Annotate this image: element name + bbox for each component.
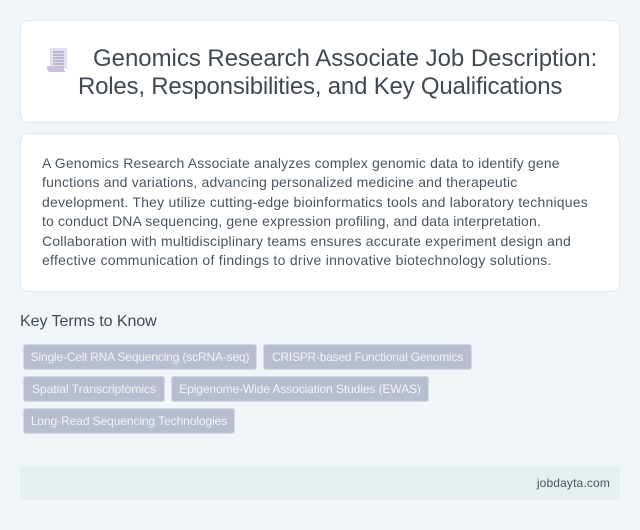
heading: key terms: Key Terms to Know <box>20 313 157 330</box>
tag: Epigenome-Wide Association Studies (EWAS) <box>179 382 421 396</box>
footer <box>20 466 620 500</box>
tag <box>171 376 429 402</box>
description text: effective communication of findings to drive innovative biotechnology solutions. <box>42 252 552 268</box>
description text: A Genomics Research Associate analyzes complex genomic data to identify gene <box>42 155 560 171</box>
description text: Collaboration with multidisciplinary teams ensures accurate experiment design and <box>42 233 571 249</box>
title card <box>20 20 620 123</box>
description text: functions and variations, advancing personalized medicine and therapeutic <box>42 174 517 190</box>
tag: Long-Read Sequencing Technologies <box>31 414 227 428</box>
tag: Single-Cell RNA Sequencing (scRNA-seq) <box>31 350 249 364</box>
tag <box>23 344 257 370</box>
icon: document scroll <box>47 48 67 72</box>
title <box>78 45 597 100</box>
description text: development. They utilize cutting-edge bioinformatics tools and laboratory techniques <box>42 194 588 210</box>
tag: CRISPR-based Functional Genomics <box>272 350 463 364</box>
description text: to conduct DNA sequencing, gene expression profiling, and data interpretation. <box>42 213 541 229</box>
tag: Spatial Transcriptomics <box>32 382 156 396</box>
tag <box>263 344 472 370</box>
title: Roles, Responsibilities, and Key Qualifications <box>78 73 562 100</box>
description text <box>42 155 588 268</box>
tag <box>23 376 165 402</box>
footer source: jobdayta.com <box>537 476 610 490</box>
tag <box>23 408 235 434</box>
description card <box>20 133 620 292</box>
tag list <box>23 344 472 434</box>
title: Genomics Research Associate Job Description: <box>93 45 597 72</box>
